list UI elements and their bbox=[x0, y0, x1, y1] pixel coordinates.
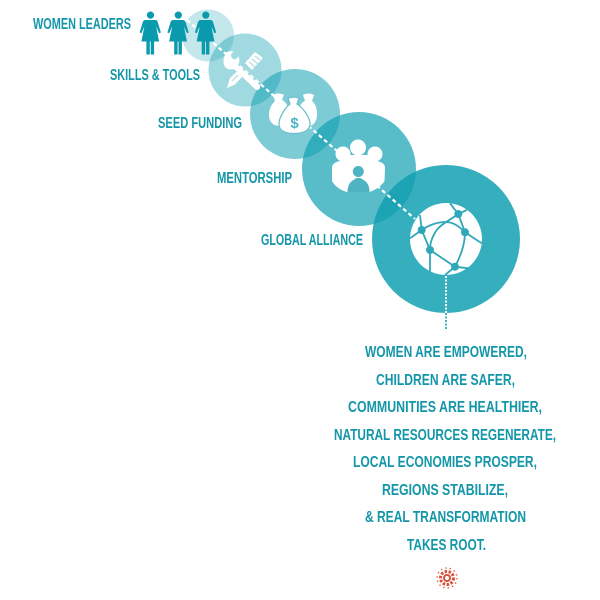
icon: three women bbox=[140, 12, 216, 54]
circle: mentorship bbox=[302, 112, 416, 226]
text block: outcomes: TAKES ROOT. bbox=[407, 537, 486, 554]
dotted connector: vertical inside circle bbox=[445, 276, 447, 313]
text block: outcomes bbox=[334, 344, 556, 554]
circle: women leaders bbox=[182, 10, 234, 62]
label: mentorship: MENTORSHIP bbox=[217, 170, 292, 187]
icon: woman 3 bbox=[195, 12, 216, 54]
text block: outcomes: COMMUNITIES ARE HEALTHIER, bbox=[348, 399, 542, 416]
text: dollar sign: $ bbox=[290, 115, 299, 132]
dotted connector: vertical below circle bbox=[445, 313, 447, 330]
icon: globe network bbox=[410, 203, 482, 275]
text block: outcomes: CHILDREN ARE SAFER, bbox=[376, 372, 515, 389]
icon: red sunburst bbox=[437, 568, 457, 588]
label: skills and tools: SKILLS & TOOLS bbox=[110, 67, 200, 84]
icon: wrench, pencil and ruler bbox=[223, 51, 263, 90]
circle: seed funding bbox=[250, 69, 340, 159]
icon: woman 1 bbox=[140, 12, 161, 54]
circle: global alliance bbox=[372, 165, 520, 313]
dotted connector: diagonal bbox=[187, 20, 415, 219]
circle: skills and tools bbox=[208, 34, 282, 106]
label: global alliance: GLOBAL ALLIANCE bbox=[261, 232, 363, 249]
label: women leaders: WOMEN LEADERS bbox=[33, 16, 131, 33]
text block: outcomes: LOCAL ECONOMIES PROSPER, bbox=[353, 454, 537, 471]
text block: outcomes: & REAL TRANSFORMATION bbox=[365, 509, 526, 526]
icon: woman 2 bbox=[167, 12, 189, 54]
text block: outcomes: WOMEN ARE EMPOWERED, bbox=[365, 344, 527, 361]
text block: outcomes: REGIONS STABILIZE, bbox=[382, 482, 508, 499]
label: seed funding: SEED FUNDING bbox=[158, 115, 242, 132]
icon: ruler ticks bbox=[232, 56, 260, 81]
icon: mentor group bbox=[332, 140, 385, 192]
icon: money bags bbox=[269, 94, 317, 134]
